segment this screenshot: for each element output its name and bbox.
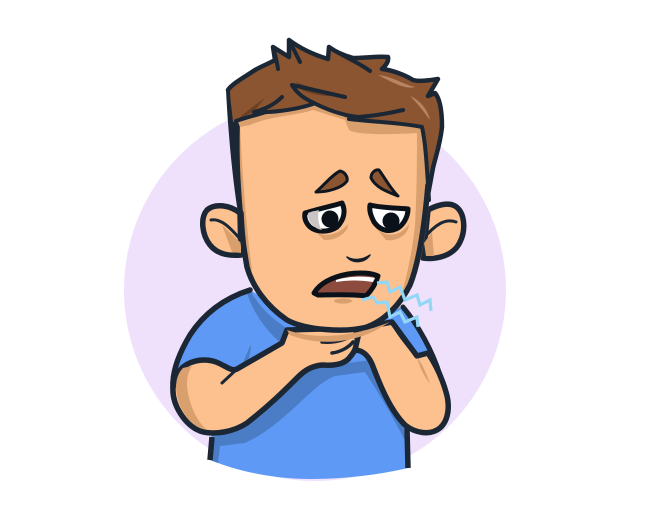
left arm and hand <box>173 328 357 433</box>
right sleeve <box>392 307 428 356</box>
pain lightning lines <box>362 282 431 327</box>
eyebrows <box>316 170 398 196</box>
nose <box>347 255 370 262</box>
right ear <box>423 204 464 258</box>
fingers <box>322 335 353 353</box>
background circle <box>124 99 506 481</box>
left ear <box>203 206 241 255</box>
right arm and hand <box>287 307 448 433</box>
head side wedge <box>226 90 243 213</box>
t-shirt <box>173 290 447 479</box>
head and face <box>234 100 431 330</box>
mouth <box>314 273 378 296</box>
eyes <box>305 203 409 240</box>
hair <box>226 40 442 213</box>
character: man with sore throat <box>173 40 464 479</box>
chin shadow <box>334 298 352 304</box>
